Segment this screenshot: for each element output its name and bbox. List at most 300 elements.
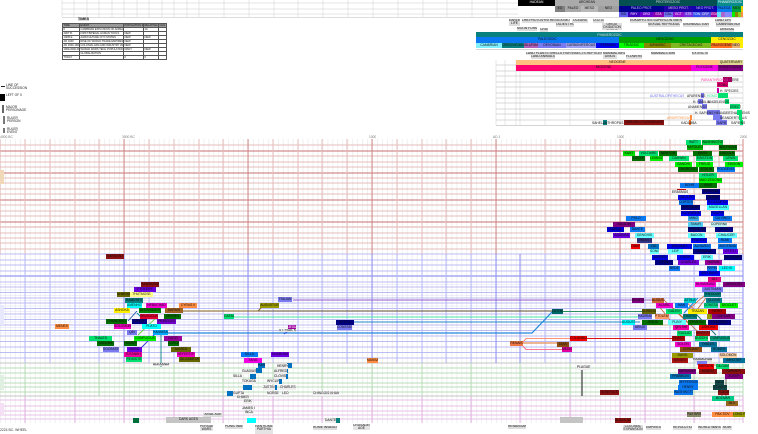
- cluster: medieval era, lower right: THEODOR: [704, 292, 721, 296]
- human evolution small chart: SAHELANTHROPUS: [592, 121, 624, 125]
- cluster: medieval era, lower right: HOMER: [713, 347, 725, 351]
- cluster: ancient Near East and Egypt: NEFERTITI: [178, 352, 194, 356]
- cluster: medieval era, lower right: SOLOMON: [720, 353, 736, 357]
- top geologic bars: Hadean to Phanerozoic: ARCHEAN: [579, 0, 595, 4]
- cluster: ancient Near East and Egypt: BUDDHA: [99, 341, 112, 345]
- cluster: ancient Near East and Egypt: PEISISTR: [126, 357, 142, 361]
- epoch top row: NEOGENE: [609, 60, 626, 64]
- human evolution small chart: AUSTRALOPITHECUS: [650, 94, 684, 98]
- legend: tall bar: RULER: [7, 116, 18, 120]
- cluster: modern era, upper right: WILLIAM I: [672, 244, 687, 248]
- cluster: medieval era, lower right: CICERO: [684, 314, 696, 318]
- cluster: ancient Near East and Egypt: ASHOKA: [115, 308, 129, 312]
- cluster: medieval era, lower right: SOLON: [677, 342, 689, 346]
- cluster: medieval era, lower right: DIOCLET: [722, 303, 736, 307]
- human evolution small chart: H. HABILIS: [693, 100, 710, 104]
- cluster: medieval columns: JUSTIN: [263, 385, 275, 389]
- top geologic bars: Hadean to Phanerozoic: MESO: [585, 6, 594, 10]
- cluster: medieval era, lower right: GALEN: [668, 308, 680, 312]
- cluster: modern era, upper right: ERASMUS: [672, 190, 688, 194]
- events table: 400T B.: [64, 32, 73, 35]
- cluster: medieval era, lower right: EUCLID: [678, 330, 691, 334]
- cluster: medieval era, lower right: ASHOKA: [702, 325, 715, 329]
- axis tick labels: [0, 135, 747, 139]
- cluster: ancient Near East and Egypt: PERICLES: [158, 319, 175, 323]
- top geologic bars: Hadean to Phanerozoic: ORO: [643, 12, 650, 16]
- epoch lower row: [516, 65, 691, 71]
- cluster: ancient Near East and Egypt: CONFUCIUS: [135, 336, 155, 340]
- cluster: ancient Near East and Egypt: THUTMOSE: [132, 292, 151, 296]
- eon row: [476, 32, 743, 38]
- human evolution small chart: [592, 77, 750, 125]
- cluster: medieval era, lower right: STUART: [713, 384, 727, 388]
- cluster: medieval columns: CHINGGIS KHAN: [313, 391, 339, 395]
- cluster: modern era, upper right: DA VINCI: [715, 216, 730, 220]
- cluster: medieval era, lower right: JESUS: [647, 320, 658, 324]
- cluster: modern era, upper right: MUHAMMAD: [696, 282, 715, 286]
- cluster: medieval era, lower right: ATTILA: [685, 298, 695, 302]
- cluster: medieval era, lower right: ARIUS: [635, 325, 645, 329]
- axis tick labels: 3000 BC: [122, 135, 135, 139]
- cluster: medieval era, lower right: PLATO: [673, 336, 684, 340]
- cluster: modern era, upper right: KUBLAI: [610, 227, 621, 231]
- cluster: medieval era, lower right: GILGAM: [716, 364, 729, 368]
- top geologic bars: Hadean to Phanerozoic: ECT: [675, 12, 682, 16]
- cluster: medieval columns: NORSE: [267, 391, 279, 395]
- cluster: modern era, upper right: URBAN II: [637, 238, 652, 242]
- cluster: modern era, upper right: ERIK: [703, 254, 711, 258]
- cluster: medieval columns: KHMER: [237, 395, 249, 399]
- label: antiquity: [0, 305, 4, 325]
- cluster: modern era, upper right: MAGELLAN: [709, 205, 727, 209]
- cluster: modern era, upper right: PEPIN: [707, 266, 717, 270]
- human evolution small chart: ORRORIN TUGENENSIS: [625, 120, 663, 124]
- cluster: modern era, upper right: ALI: [712, 276, 717, 280]
- cluster: early modern connected bars: RENAIS: [510, 341, 523, 345]
- cluster: medieval era, lower right: ALARIC: [659, 303, 670, 307]
- bar: dark ages block: [560, 417, 583, 423]
- axis tick labels: 1000: [617, 135, 624, 139]
- era row: [476, 37, 619, 42]
- cluster: modern era, upper right: POLO: [631, 216, 641, 220]
- cluster: medieval columns: INCA: [245, 410, 253, 414]
- cluster: modern era, upper right: KANT: [625, 151, 633, 155]
- connector lines: [128, 295, 726, 396]
- epoch lower row: MIOCENE: [596, 65, 611, 69]
- top geologic bars: Hadean to Phanerozoic: MESO PROT.: [668, 6, 689, 10]
- cluster: modern era, upper right: EINSTEIN: [697, 156, 712, 160]
- bottom period labels and bars: [133, 413, 732, 434]
- legend: thin bar: MAJOR: [6, 105, 17, 109]
- events table: 10: [144, 28, 147, 31]
- cluster: ancient Near East and Egypt: RAMESES: [126, 298, 142, 302]
- Phanerozoic bars: CARBONIFEROUS: [567, 42, 595, 46]
- cluster: Roman era: ATTILA: [340, 320, 350, 324]
- human evolution small chart: PARANTHROPUS: [701, 78, 728, 82]
- cluster: medieval era, lower right: PAUL: [710, 314, 719, 318]
- cluster: medieval columns: DANTE: [325, 418, 336, 422]
- events table: [62, 23, 167, 60]
- cluster: medieval era, lower right: SARGON: [699, 364, 713, 368]
- cluster: medieval era, lower right: BONIFACE: [601, 390, 618, 394]
- period row: [476, 42, 502, 48]
- cluster: ancient Near East and Egypt: NEBUCHAD: [147, 303, 166, 307]
- Phanerozoic bars: CENOZOIC: [718, 37, 736, 41]
- cluster: modern era, upper right: AQUINAS: [614, 232, 629, 236]
- cluster: modern era, upper right: WATT: [689, 140, 698, 144]
- cluster: modern era, upper right: LINCOLN: [720, 151, 734, 155]
- main chart fine vertical grid: [0, 139, 743, 423]
- cluster: medieval era, lower right: BOLIVAR: [716, 396, 730, 400]
- label: age of writing: [203, 413, 223, 417]
- human evolution small chart: ANAMENSIS: [688, 105, 707, 109]
- human evolution small chart: H. SPECIES: [720, 88, 739, 92]
- cluster: modern era, upper right: MAHMUD: [697, 249, 712, 253]
- cluster: modern era, upper right: MAO ZEDONG: [699, 178, 722, 182]
- top geologic bars: Hadean to Phanerozoic: CAL: [665, 12, 672, 16]
- cluster: modern era, upper right: HITLER: [702, 172, 714, 176]
- legend: short bar: EVENT: [7, 130, 18, 134]
- top geologic bars: Hadean to Phanerozoic: NEO PROT.: [696, 6, 714, 10]
- top time scale grid: [62, 3, 518, 14]
- events table: AD 1000: [64, 40, 74, 43]
- Phanerozoic bars: ORDOVICIAN: [503, 42, 523, 46]
- eon row: PHANEROZOIC: [597, 33, 622, 37]
- events table: 0: [64, 28, 65, 31]
- cluster: medieval columns: SILLA: [245, 352, 254, 356]
- events table: AGRICULTURE CITY-STATES: [80, 36, 116, 39]
- legend: black ruler box: LEFT OF X: [6, 93, 22, 97]
- cluster: early modern connected bars: DIAS: [559, 342, 567, 346]
- cluster: modern era, upper right: ELIZABETH: [709, 200, 726, 204]
- cluster: medieval columns: CHARLEM: [272, 352, 288, 356]
- cluster: modern era, upper right: [607, 140, 745, 287]
- cluster: modern era, upper right: SALADIN: [617, 222, 631, 226]
- human evolution small chart: ROBU: [718, 83, 728, 87]
- human evolution small chart: HOMO: [707, 94, 717, 98]
- cluster: modern era, upper right: HARUN: [708, 260, 719, 264]
- cluster: modern era, upper right: NEWTON: [661, 151, 675, 155]
- top geologic bars: Hadean to Phanerozoic: STA: [655, 12, 662, 16]
- cluster: modern era, upper right: CHARLES: [681, 260, 696, 264]
- epoch top row: [516, 60, 719, 65]
- cluster: modern era, upper right: DARWIN: [672, 156, 686, 160]
- period row: SID: [621, 12, 626, 16]
- legend: short bar: RULER: [7, 127, 18, 131]
- cluster: medieval era, lower right: PAX SOV: [715, 412, 730, 416]
- axis tick labels: AD 1: [493, 135, 500, 139]
- cluster: medieval era, lower right: IMHOTEP: [726, 358, 742, 362]
- era row: EO: [558, 6, 562, 10]
- bar: early king: [106, 254, 124, 259]
- cluster: medieval columns: GUPTA: [233, 391, 244, 395]
- cluster: medieval era, lower right: CAESAR: [717, 314, 730, 318]
- Phanerozoic bars: MESOZOIC: [656, 37, 674, 41]
- cluster: modern era, upper right: MACHIAV: [704, 189, 718, 193]
- cluster: medieval era, lower right: SPARTAC: [689, 320, 705, 324]
- cluster: ancient Near East and Egypt: DARIUS: [168, 308, 180, 312]
- labels beside medieval bars: HENRY: [277, 364, 288, 368]
- cluster: modern era, upper right: AVICENNA: [719, 244, 736, 248]
- cluster: medieval columns: GLADIUS: [242, 369, 256, 373]
- cluster: modern era, upper right: LEIF: [672, 249, 679, 253]
- cluster: medieval era, lower right: FRANKLIN: [672, 374, 689, 378]
- cluster: modern era, upper right: GANDHI: [677, 162, 690, 166]
- cluster: medieval era, lower right: KHUFU: [702, 369, 714, 373]
- source footnote: 2224 BC. WHEEL: [0, 428, 27, 432]
- axis tick labels: 4000 BC: [0, 135, 13, 139]
- human evolution small chart: ARDIPITHECUS: [667, 116, 692, 120]
- Cenozoic bars: PLEISTOCENE: [719, 65, 742, 69]
- cluster: modern era, upper right: LEIBNIZ: [650, 156, 663, 160]
- human evolution small chart: KADABBA: [681, 121, 697, 125]
- cluster: modern era, upper right: JOAN: [720, 227, 728, 231]
- cluster: medieval era, lower right: MLK: [729, 401, 735, 405]
- events table: 0: [124, 56, 126, 59]
- cluster: ancient Near East and Egypt: TUTANKH: [125, 352, 141, 356]
- events table: FIRST BIPEDAL HUMAN TOOLS: [80, 32, 119, 35]
- human evolution small chart: SAPIE: [717, 121, 727, 125]
- cluster: ancient Near East and Egypt: SOLOMON: [114, 324, 131, 328]
- cluster: ancient Near East and Egypt: DAVID: [130, 347, 139, 351]
- cluster: modern era, upper right: OTTO I: [725, 249, 736, 253]
- cluster: medieval columns: TOKUGA: [242, 379, 256, 383]
- axis tick labels: 2000: [740, 135, 747, 139]
- cluster: medieval columns: TANG: [249, 358, 257, 362]
- top geologic bars: Hadean to Phanerozoic: NEO: [605, 6, 612, 10]
- Phanerozoic bars: TRIASSIC: [624, 42, 639, 46]
- events table: NEW: [144, 36, 151, 39]
- Cenozoic bars: [516, 60, 743, 71]
- label: modern: [0, 375, 4, 390]
- human evolution small chart: H. SAPIENS NEANDERTHAL DENIS: [695, 110, 750, 114]
- cluster: medieval era, lower right: CLOVIS: [708, 298, 720, 302]
- era row: PALEOZOIC: [538, 37, 557, 41]
- cluster: ancient Near East and Egypt: HOMER: [124, 341, 137, 345]
- events table: WORLD WARS TECH POPULATION: [80, 48, 124, 51]
- human evolution small chart: ERECT: [730, 105, 741, 109]
- legend: [0, 83, 27, 134]
- species bars: [723, 77, 732, 82]
- eon row: HADEAN: [530, 0, 543, 4]
- top geologic bars: Hadean to Phanerozoic: PROTEROZOIC: [656, 0, 680, 4]
- cluster: ancient Near East and Egypt: XERXES: [166, 314, 179, 318]
- cluster: modern era, upper right: DANTE: [632, 227, 643, 231]
- cluster: medieval era, lower right: HENRY: [682, 384, 694, 388]
- events table: NEW: [124, 40, 131, 43]
- Cenozoic bars: PLIOCENE: [696, 65, 713, 69]
- cluster: medieval columns: [227, 352, 378, 423]
- cluster: modern era, upper right: MARX: [698, 151, 707, 155]
- human evolution small chart: ERE: [732, 78, 739, 82]
- Phanerozoic bars: PERMIAN: [600, 42, 616, 46]
- Phanerozoic bars: NEO: [732, 42, 740, 46]
- cluster: medieval era, lower right: PLINY: [672, 320, 682, 324]
- cluster: ancient Near East and Egypt: LAOZI: [168, 336, 178, 340]
- events table: 0: [144, 56, 146, 59]
- cluster: medieval era, lower right: [600, 287, 745, 423]
- cluster: medieval columns: ALFRED: [274, 369, 287, 373]
- events table: EVENT: [80, 24, 89, 27]
- bar: iron age start: [133, 418, 139, 423]
- cluster: ancient Near East and Egypt: GILGAMESH: [180, 357, 199, 361]
- cluster: medieval columns: WYCLIF: [267, 379, 279, 383]
- cluster: medieval era, lower right: DAVID: [678, 353, 687, 357]
- cluster: early modern connected bars: PLAGUE: [577, 365, 590, 369]
- era row: [555, 6, 565, 12]
- label: recent: [0, 403, 4, 415]
- human evolution small chart: SAPIENS: [731, 121, 745, 125]
- table heading: [78, 18, 89, 21]
- top geologic bars: Hadean to Phanerozoic: EDI: [711, 12, 717, 16]
- legend: line of succession: SUCCESSION: [6, 86, 27, 90]
- bar: bronze age collapse: [166, 417, 211, 423]
- table heading: TIMES: [78, 16, 89, 20]
- legend: short bar: [3, 127, 18, 134]
- cluster: ancient Near East and Egypt: [55, 287, 200, 366]
- side zone labels: [0, 170, 4, 415]
- Phanerozoic bars: JURASSIC: [649, 42, 666, 46]
- legend: thin bar: [2, 105, 26, 113]
- events table: TODAY: [64, 56, 72, 59]
- cluster: medieval era, lower right: HAN: [678, 303, 685, 307]
- axis tick labels: 1000: [369, 135, 376, 139]
- cluster: medieval era, lower right: NERO: [712, 308, 722, 312]
- cluster: medieval era, lower right: ZOSER: [728, 374, 740, 378]
- cluster: modern era, upper right: GENGHIS: [637, 232, 652, 236]
- human history small chart grid: [496, 60, 743, 125]
- cluster: modern era, upper right: ALFRED: [653, 254, 666, 258]
- cluster: ancient Near East and Egypt: QIN: [129, 330, 135, 334]
- cluster: medieval era, lower right: ZOROAST: [683, 347, 699, 351]
- cluster: modern era, upper right: EDISON: [728, 162, 740, 166]
- cluster: modern era, upper right: MING: [689, 216, 698, 220]
- cluster: modern era, upper right: VOLTAIRE: [641, 151, 656, 155]
- legend: line of succession: LINE OF: [6, 83, 18, 87]
- legend: thin bar: PERSONAGE: [6, 108, 26, 112]
- human evolution small chart: ANGELENSIS: [708, 100, 729, 104]
- blue zone horizontal grid: [0, 254, 743, 358]
- cluster: modern era, upper right: BEDE: [670, 266, 679, 270]
- cluster: medieval era, lower right: ABRAHAM: [679, 369, 695, 373]
- cluster: medieval columns: JAMES I: [242, 406, 255, 410]
- cluster: modern era, upper right: LOCKE: [633, 156, 644, 160]
- top geologic bars: Hadean to Phanerozoic: PALEO: [568, 6, 578, 10]
- legend: tall bar: [3, 116, 20, 124]
- events table: CHG: [160, 24, 165, 27]
- cluster: ancient Near East and Egypt: THALES: [94, 336, 107, 340]
- Phanerozoic bars: PALEOGENE: [711, 42, 732, 46]
- cluster: medieval era, lower right: CONFUCIUS: [710, 336, 730, 340]
- cluster: medieval columns: LEO: [282, 391, 289, 395]
- cluster: Roman era: AUGUSTUS: [260, 303, 279, 307]
- cluster: Roman era: [224, 297, 354, 332]
- label: prehistory: [0, 170, 4, 184]
- main chart major vertical grid: [0, 139, 719, 254]
- top geologic bars: Hadean to Phanerozoic: CRY: [702, 12, 709, 16]
- cluster: medieval columns: SILLA: [233, 374, 242, 378]
- cluster: medieval era, lower right: QIN SHI: [675, 325, 687, 329]
- legend: tall bar: PERSON: [7, 119, 20, 123]
- cluster: modern era, upper right: RUMI: [721, 238, 729, 242]
- cluster: modern era, upper right: CID: [651, 244, 656, 248]
- cluster: medieval columns: HAN: [258, 363, 265, 367]
- Phanerozoic bars: DEVONIAN: [543, 42, 561, 46]
- cluster: modern era, upper right: SULEIMAN: [682, 205, 699, 209]
- red zone horizontal grid: [0, 145, 743, 249]
- cluster: medieval era, lower right: MOSES: [674, 358, 686, 362]
- cluster: modern era, upper right: KING: [704, 183, 712, 187]
- top geologic bars: Hadean to Phanerozoic: PALEOZ.: [718, 6, 731, 10]
- cluster: modern era, upper right: GREGORY: [726, 282, 742, 286]
- bar: early king: SARGON I: [107, 254, 123, 258]
- events table: GLOBALIZATION: [80, 52, 101, 55]
- top geologic bars: Hadean to Phanerozoic: RHY: [631, 12, 637, 16]
- legend: line of succession: [1, 83, 27, 90]
- events table: TIME: [64, 24, 70, 27]
- legend: black ruler box: [0, 93, 22, 101]
- cluster: modern era, upper right: CHURCHILL: [679, 167, 697, 171]
- cluster: ancient Near East and Egypt: PLATO: [146, 324, 157, 328]
- cluster: medieval era, lower right: HANNIBAL: [711, 320, 728, 324]
- cluster: medieval era, lower right: NARMER: [726, 369, 741, 373]
- cluster: modern era, upper right: AL-KHWAR: [724, 254, 742, 258]
- Cenozoic bars: QUATERNARY: [720, 60, 742, 64]
- cluster: ancient Near East and Egypt: ALEXANDER: [140, 308, 160, 312]
- events table: NEW: [144, 48, 151, 51]
- events table: NEW: [124, 32, 131, 35]
- green and purple zone horizontal grid: [0, 368, 743, 392]
- cluster: modern era, upper right: BACON: [691, 232, 702, 236]
- events table: 10KB E.: [64, 36, 73, 39]
- cluster: modern era, upper right: FRANCIS: [692, 238, 706, 242]
- cluster: modern era, upper right: GALILEO: [679, 194, 694, 198]
- cluster: modern era, upper right: ALHAZEN: [694, 244, 710, 248]
- events table: MANY: [124, 48, 132, 51]
- cluster: medieval columns: ERIK: [244, 399, 252, 403]
- cluster: modern era, upper right: LEO III: [722, 266, 732, 270]
- top geologic bars: Hadean to Phanerozoic: STE: [685, 12, 692, 16]
- cluster: modern era, upper right: LENIN: [726, 156, 735, 160]
- cluster: ancient Near East and Egypt: SELEUCUS: [140, 314, 158, 318]
- top geologic bars: Hadean to Phanerozoic: TON: [693, 12, 700, 16]
- cluster: medieval era, lower right: JUSTINIAN: [704, 287, 721, 291]
- human evolution small chart: NEANDERTHALS: [720, 116, 747, 120]
- cluster: medieval columns: CHARLES: [280, 385, 296, 389]
- cluster: modern era, upper right: STALIN: [701, 167, 712, 171]
- cluster: modern era, upper right: AKBAR: [707, 194, 719, 198]
- cluster: ancient Near East and Egypt: PTOLEMY: [137, 287, 153, 291]
- Phanerozoic bars: CRETACEOUS: [680, 42, 702, 46]
- cluster: ancient Near East and Egypt: CYRUS II: [181, 303, 195, 307]
- cluster: modern era, upper right: ABU BAKR: [701, 271, 718, 275]
- period row: [619, 12, 628, 17]
- cluster: modern era, upper right: CYRIL: [659, 260, 669, 264]
- Phanerozoic bars: [476, 32, 743, 59]
- cluster: modern era, upper right: BOHR: [685, 183, 694, 187]
- cluster: medieval columns: CLOVIS: [274, 374, 286, 378]
- cluster: ancient Near East and Egypt: ZHOU: [135, 319, 144, 323]
- cluster: ancient Near East and Egypt: MOSES: [175, 347, 187, 351]
- cluster: modern era, upper right: CORTES: [679, 200, 693, 204]
- cluster: ancient Near East and Egypt: CHANDRAG: [107, 319, 126, 323]
- cluster: modern era, upper right: RURIK: [680, 254, 691, 258]
- cluster: medieval columns: HUN: [324, 391, 331, 395]
- cluster: early modern connected bars: [510, 309, 590, 370]
- cluster: modern era, upper right: TIMUR: [690, 222, 701, 226]
- cluster: Roman era: TRAJAN: [279, 297, 291, 301]
- cluster: modern era, upper right: FREUD: [699, 162, 710, 166]
